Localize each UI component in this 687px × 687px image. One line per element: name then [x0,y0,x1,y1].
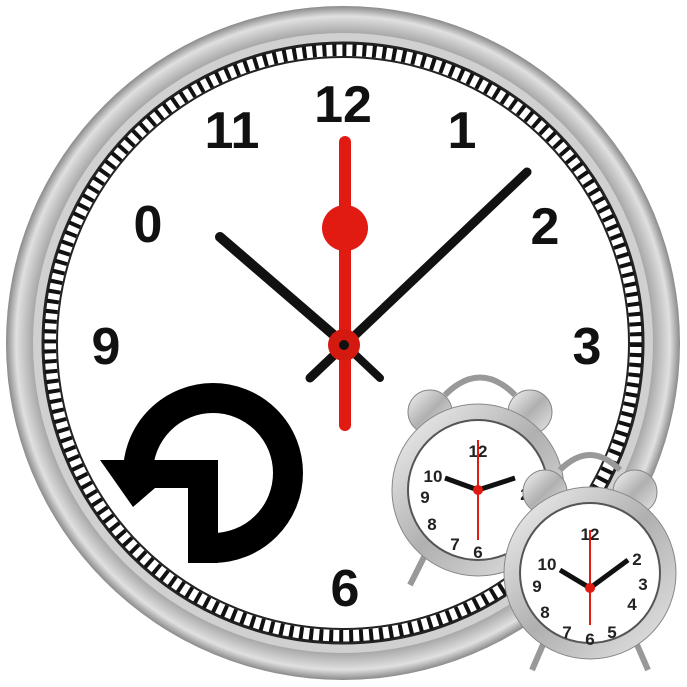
numerals: 0 [134,196,162,254]
alarm clock 2: 10 [538,555,556,574]
alarm clock 1: 6 [473,543,483,562]
alarm clock 1 [392,378,564,585]
numerals: 2 [531,198,559,256]
alarm clock 1: 2 [520,485,530,504]
logo [100,398,288,563]
alarm clock 2: 8 [540,603,550,622]
hands [220,142,527,425]
alarm clock 2 [504,455,676,670]
alarm clock 1: 7 [450,535,460,554]
alarm clock 2: 5 [607,623,617,642]
alarm clock 1: 8 [427,515,437,534]
alarm clock 2: 2 [632,550,642,569]
alarm clock 2: 3 [638,575,648,594]
alarm clock 2: 7 [562,623,572,642]
numerals [92,76,601,618]
alarm clock 1: 12 [469,442,487,461]
alarm clock 2: 9 [532,577,542,596]
numerals: 12 [314,76,372,134]
alarm clock 1: 9 [420,488,430,507]
numerals: 3 [573,318,601,376]
alarm clock 1: 10 [424,467,442,486]
numerals: 1 [448,102,476,160]
numerals: 11 [205,102,259,160]
alarm clock 2: 12 [581,525,599,544]
alarm clock 2: 4 [627,595,637,614]
numerals: 9 [92,318,120,376]
numerals: 6 [331,560,359,618]
alarm clock 2: 6 [585,630,595,649]
